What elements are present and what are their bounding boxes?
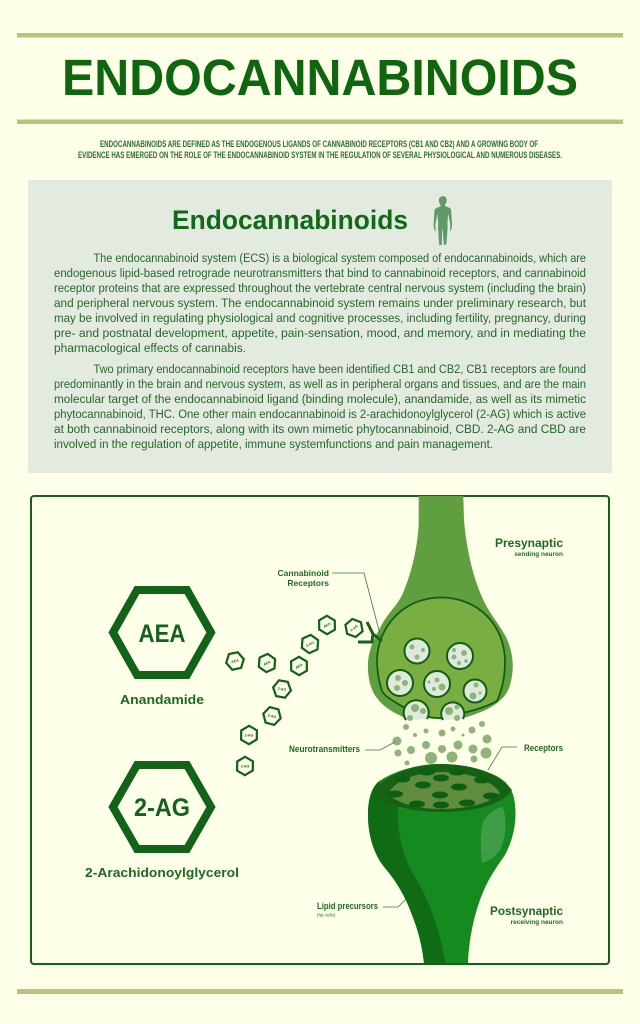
text block: second paragraph: involved in the regulation of appetite, immune systemfunctions and pain management. <box>54 437 493 451</box>
label: Lipid precursors: (fat cells) <box>317 912 336 918</box>
subtitle text <box>78 139 562 160</box>
presynaptic neuron <box>368 496 513 721</box>
text block: second paragraph: predominantly in the brain and nervous system, as well as in peripheral organs and tissues, and are the main <box>54 377 586 391</box>
vesicles <box>387 638 486 721</box>
arrow: lipid precursors leader <box>383 899 406 907</box>
arrow: cannabinoid receptors leader <box>332 573 381 638</box>
molecules stream: AEA <box>231 658 240 664</box>
text block: first paragraph: pharmacological effects of cannabis. <box>54 341 246 355</box>
panel: endocannabinoid description <box>28 180 612 473</box>
text block: first paragraph: may be involved in regulating physiological and cognitive processes, including fertility, pregnancy, during <box>54 311 586 325</box>
label: Cannabinoid Receptors: Cannabinoid <box>278 568 329 578</box>
label: Postsynaptic: receiving neuron <box>511 919 563 926</box>
molecules stream: 2-AG <box>241 764 249 768</box>
receptor surface <box>388 772 500 809</box>
panel: synapse diagram frame <box>31 496 609 964</box>
text block: first paragraph: receptor proteins that are expressed throughout the vertebrate central nervous system (including the brain) <box>54 281 586 295</box>
hexagon: AEA: AEA <box>138 620 186 648</box>
text block: second paragraph: at both cannabinoid receptors, along with its own mimetic phytocannabinoid, CBD. 2-AG and CBD are <box>54 422 586 436</box>
label: Cannabinoid Receptors <box>278 568 329 588</box>
molecules stream: AEA <box>323 621 332 629</box>
icon: human figure <box>434 196 452 245</box>
hexagon: 2-AG: 2-AG <box>134 794 190 822</box>
label: Cannabinoid Receptors: Receptors <box>287 578 329 588</box>
hexagon: 2-AG <box>113 765 211 849</box>
text block: first paragraph: pre- and postnatal development, appetite, pain-sensation, mood, and memory, and in mediating the <box>54 326 586 340</box>
label: Lipid precursors: Lipid precursors <box>317 901 378 912</box>
synaptic knob interior <box>377 598 505 718</box>
molecules stream: AEA <box>295 662 304 670</box>
label: Presynaptic <box>495 536 563 558</box>
molecules stream: 2-AG <box>277 687 287 692</box>
label: Postsynaptic <box>490 904 563 926</box>
icon: cannabinoid receptor <box>358 622 382 642</box>
arrow: neurotransmitters leader <box>365 742 395 750</box>
label: Presynaptic: sending neuron <box>514 551 563 558</box>
text block: first paragraph: The endocannabinoid system (ECS) is a biological system composed of endocannabinoids, which are <box>94 251 586 265</box>
label: Anandamide: Anandamide <box>120 692 204 707</box>
text block: second paragraph: Two primary endocannabinoid receptors have been identified CB1 and CB2, CB1 receptors are found <box>94 362 586 376</box>
label: Receptors: Receptors <box>524 743 563 753</box>
panel heading: Endocannabinoids <box>172 205 408 235</box>
molecules stream: 2-AG <box>305 641 315 648</box>
label: Presynaptic: Presynaptic <box>495 536 563 550</box>
receptors <box>387 768 499 808</box>
molecules stream: 2-AG <box>267 713 277 719</box>
text block: second paragraph <box>54 362 586 451</box>
text block: second paragraph: molecular target of the endocannabinoid ligand (binding molecule), anandamide, as well as its mimetic <box>54 392 586 406</box>
label: 2-Arachidonoylglycerol: 2-Arachidonoylglycerol <box>85 865 239 880</box>
neurotransmitter dots <box>392 721 492 766</box>
molecules stream: AEA <box>263 660 272 667</box>
molecules stream <box>225 614 366 777</box>
text block: second paragraph: phytocannabinoid, THC. One other main endocannabinoid is 2-arachidonoylglycerol (2-AG) which is active <box>54 407 586 421</box>
molecules stream: 2-AG <box>350 624 359 633</box>
label: Postsynaptic: Postsynaptic <box>490 904 563 918</box>
text block: first paragraph: endogenous lipid-based retrograde neurotransmitters that bind to cannabinoid receptors, and cannabinoid <box>54 266 586 280</box>
hexagon: AEA <box>113 590 211 675</box>
text block: first paragraph <box>54 251 587 355</box>
postsynaptic neuron <box>368 764 516 963</box>
title: ENDOCANNABINOIDS <box>62 49 578 106</box>
text block: first paragraph: and peripheral nervous system. The endocannabinoid system remains under preliminary research, but <box>54 296 587 310</box>
label: Neurotransmitters: Neurotransmitters <box>289 744 360 754</box>
label: Lipid precursors <box>317 901 378 918</box>
arrow: receptors leader <box>488 747 517 770</box>
molecules stream: 2-AG <box>245 733 253 737</box>
